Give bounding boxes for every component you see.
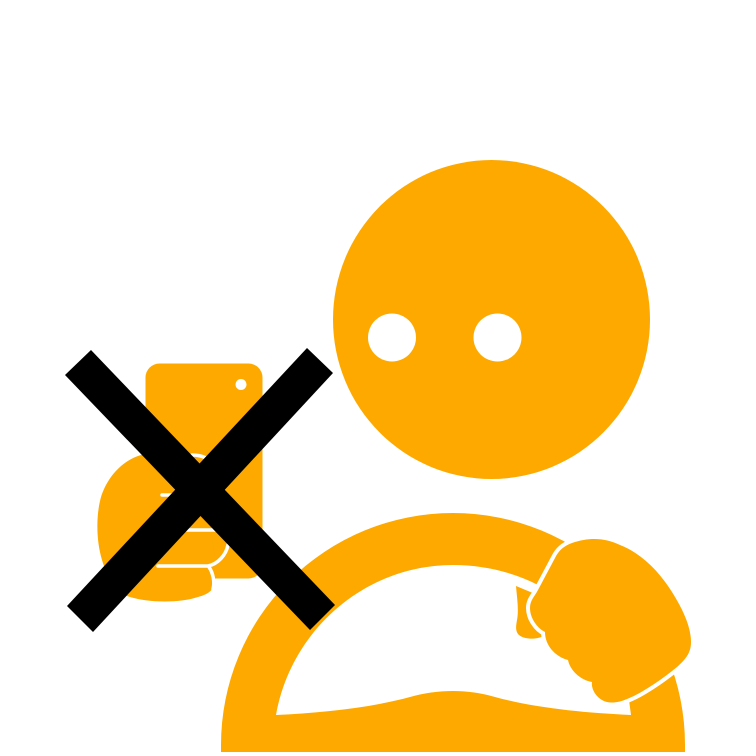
- head: [333, 160, 650, 479]
- thumb behind wheel: [516, 586, 546, 639]
- hand holding phone: [97, 450, 228, 602]
- phone camera dot: [236, 379, 246, 390]
- finger lines: [158, 455, 228, 589]
- eyes: [368, 314, 522, 362]
- phone: [146, 364, 262, 578]
- fist on steering wheel: [530, 539, 691, 703]
- crossed-out X mark: [65, 348, 335, 632]
- steering wheel and body: [221, 513, 685, 752]
